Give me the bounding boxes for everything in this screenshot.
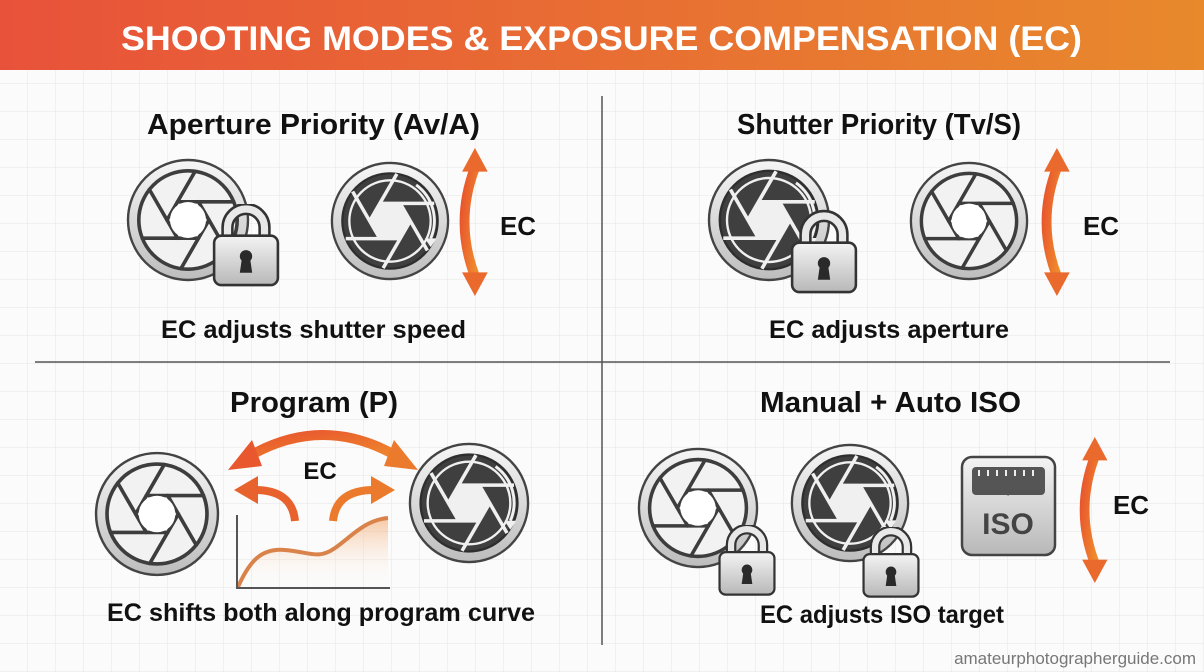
arrow: EC up/down: [462, 148, 488, 296]
title: SHOOTING MODES & EXPOSURE COMPENSATION (EC): [121, 20, 1082, 58]
icon: lock: [720, 529, 774, 595]
icon: dark aperture: [792, 445, 908, 561]
icon: light aperture: [96, 453, 218, 575]
panel: aperture priority: [128, 109, 536, 344]
heading: Aperture Priority (Av/A): [147, 109, 480, 141]
panel: manual + auto iso: [639, 387, 1149, 629]
icon: light aperture: [911, 163, 1027, 279]
heading: Program (P): [230, 387, 398, 419]
icon: ISO meter: [962, 457, 1055, 555]
caption: EC adjusts aperture: [769, 316, 1009, 344]
heading: Manual + Auto ISO: [760, 387, 1021, 419]
EC label: EC: [1083, 211, 1119, 241]
arrow: big double arc: [228, 435, 418, 470]
icon: light aperture: [128, 160, 248, 280]
EC label: EC: [1113, 490, 1149, 520]
icon: dark aperture: [709, 160, 829, 280]
icon: ISO meter: ISO: [982, 508, 1034, 541]
EC label: EC: [303, 458, 337, 485]
arrow: small left: [234, 476, 295, 521]
icon: light aperture: [639, 449, 757, 567]
arrow: EC up/down: [1044, 148, 1070, 296]
panel: program: [96, 387, 535, 627]
chart: program curve: [237, 515, 390, 588]
heading: Shutter Priority (Tv/S): [737, 109, 1021, 141]
caption: EC shifts both along program curve: [107, 599, 535, 627]
icon: dark aperture: [332, 163, 448, 279]
icon: lock: [864, 531, 918, 597]
panel: shutter priority: [709, 109, 1119, 344]
EC label: EC: [500, 211, 536, 241]
caption: EC adjusts ISO target: [760, 601, 1005, 629]
arrow: small right: [333, 476, 395, 521]
footer url: amateurphotographerguide.com: [954, 649, 1196, 668]
arrow: EC up/down: [1082, 437, 1107, 583]
caption: EC adjusts shutter speed: [161, 316, 466, 344]
icon: lock: [214, 209, 278, 285]
icon: lock: [792, 216, 856, 292]
icon: dark aperture: [410, 444, 528, 562]
header bar: [0, 0, 1204, 70]
